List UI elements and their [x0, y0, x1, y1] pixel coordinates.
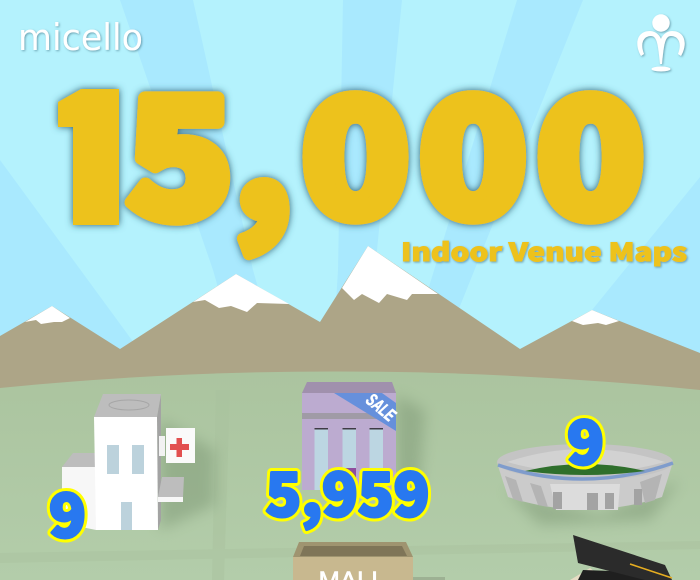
- snow caps: [25, 246, 619, 325]
- building shadows on ground: [160, 395, 680, 530]
- sale banner: [334, 393, 396, 431]
- headline number: 15,000: 1: [40, 28, 140, 265]
- store front: [302, 393, 396, 490]
- icon: mall: [293, 542, 445, 580]
- headline number: 15,000: ,: [234, 28, 292, 265]
- icon: stadium: [497, 444, 673, 510]
- subtitle: Indoor Venue Maps: [401, 233, 687, 269]
- stat: hospitals count: 9: [49, 468, 86, 555]
- headline number: 15,000: [52, 83, 650, 266]
- headline number: 15,000: 0: [536, 28, 645, 265]
- headline number: 15,000: 0: [419, 28, 527, 265]
- stat: stores count: 5,959: [266, 447, 430, 534]
- logo icon: [637, 14, 685, 72]
- stadium field: [525, 464, 645, 475]
- ground: [0, 371, 700, 580]
- stat: hospitals count: 9: [49, 468, 86, 555]
- hospital front: [94, 417, 158, 530]
- store windows: [314, 429, 383, 490]
- hospital awning: [158, 477, 184, 497]
- stat: stadiums count: 9: [567, 395, 604, 482]
- icon: hospital: [62, 394, 195, 530]
- logo wordmark: micello: micello: [18, 16, 143, 59]
- stat: stadiums count: 9: [567, 395, 604, 482]
- hospital sign: [159, 436, 165, 456]
- stat: stores count: 5,959: [266, 447, 430, 534]
- headline number: 15,000: 0: [301, 28, 410, 265]
- stadium rim: [497, 444, 673, 480]
- headline number: 15,000: 5: [127, 27, 233, 265]
- hospital roof: [94, 394, 161, 417]
- icon: graduation cap: [570, 535, 672, 580]
- hospital wing: [62, 453, 95, 467]
- icon: shopping store: SALE: [362, 389, 400, 426]
- hospital side: [157, 394, 161, 530]
- icon: shopping store: [302, 382, 400, 490]
- mountains: [0, 246, 700, 400]
- sky background with sun rays: [0, 0, 700, 400]
